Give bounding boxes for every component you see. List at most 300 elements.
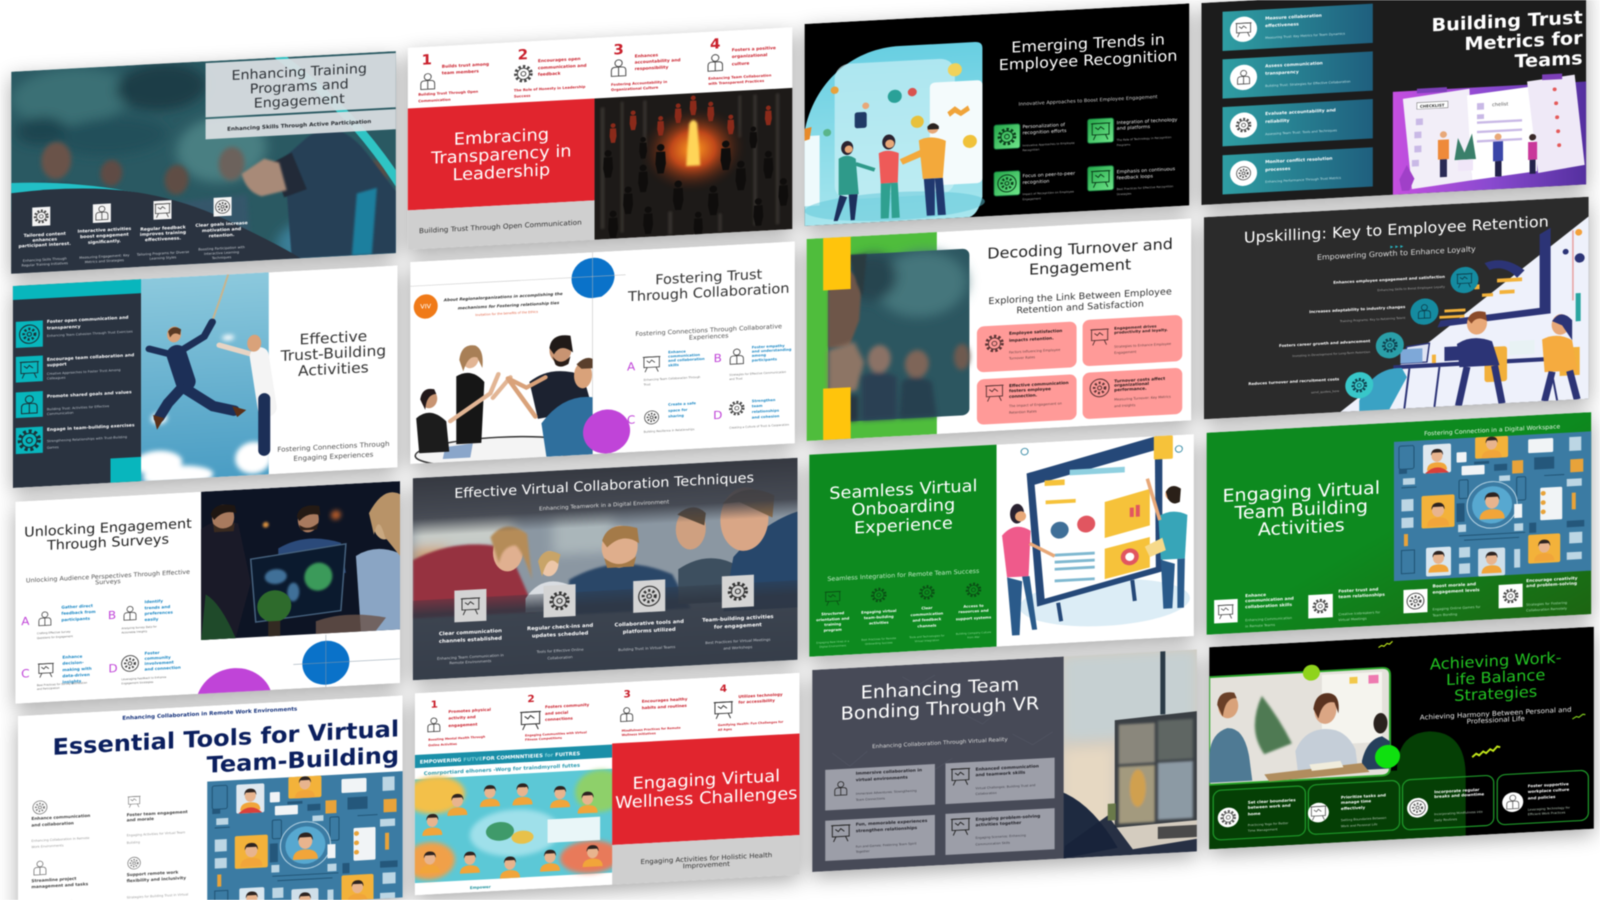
four lettered items: Crafting Effective Survey [37,630,71,635]
panel: Effective Virtual Collaboration Techniques slide [413,458,797,680]
four pink cards: Turnover Rates [1008,355,1035,361]
four teal circles [1345,266,1478,399]
four lettered items: insights [62,679,82,684]
four lettered items: decision- [62,660,84,666]
four numbered items: 2 [518,47,528,63]
subtitle: Seamless Integration for Remote Team Success [827,568,979,583]
four pink cards: Employee satisfaction [1009,328,1062,336]
four lettered items: data-driven [62,672,90,678]
four benefit rows: send_quotes_here [1311,389,1339,394]
four tool items: Foster team engagement [127,809,188,817]
purple semicircle [196,666,273,742]
four numbered items: 1 [431,700,438,711]
four numbered items: The Role of Honesty in Leadership [514,85,586,93]
panel: Engaging Virtual Wellness Challenges slide [405,673,799,896]
four benefit columns [19,196,248,271]
four cards: Engaging problem-solving [975,813,1040,823]
four lettered items: D [108,661,118,675]
four lettered items: easily [145,616,159,622]
community poster image: Comrportiard elhoners -Worg for traindmyroll futtes [424,763,580,777]
panel: Emerging Trends in Employee Recognition slide [795,3,1189,227]
illustration: checklists [1393,72,1586,195]
four cards: Communication Skills [975,841,1010,846]
four activity items: and problem-solving [1526,581,1577,589]
four activity items [1214,575,1578,630]
dark green overlay [1209,729,1466,849]
purple circle [583,408,630,455]
four activity items: Collaboration Remotely [1526,606,1567,612]
title: Upskilling: Key to Employee Retention [1244,213,1549,247]
four onboarding columns: orientation and [816,617,850,622]
four benefit rows: Fosters career growth and advancement [1279,338,1370,348]
four cards: Enhanced communication [975,763,1039,773]
four cards: Fun, memorable experiences [856,818,928,828]
four benefit rows: Reduces turnover and recruitment costs [1248,376,1340,386]
four technique columns: Regular check-ins and [527,623,593,632]
four benefit columns: Tailoring Programs for Diverse [136,250,189,257]
left list panel: Communication [47,411,74,416]
four recognition items: recognition [1022,179,1050,186]
title: Fostering Trust [655,267,763,288]
subtitle panel grey: Improvement [683,860,730,870]
four pink cards: Strategies to Enhance Employee [1114,342,1171,349]
four onboarding columns: from Afar [967,635,981,639]
left list panel: Promote shared goals and values [47,389,132,400]
four lettered items: among [752,353,766,358]
four numbered items: 3 [613,42,624,58]
panel: Building Trust Metrics for Teams slide [1202,0,1586,205]
title: Engagement [1029,256,1131,279]
four numbered items: Promotes physical [448,707,492,714]
four cards: and teamwork skills [975,770,1026,778]
four lettered items: communication [668,353,700,359]
four lettered items: involvement [145,660,174,666]
four recognition items: Best Practices for Effective Recognition [1117,184,1174,191]
four strategy cards: between work and [1248,803,1291,810]
panel: Essential Tools for Virtual Team-Building slide [18,695,405,900]
four tool items: flexibility and inclusivity [127,875,186,883]
four teal metric bars [1223,4,1373,195]
four recognition items: feedback loops [1117,174,1154,181]
photo: high five team [415,334,593,470]
panel: Upskilling slide [1204,197,1589,419]
garbled header text: About Regionalorganizations in accomplishing the [443,291,563,302]
four lettered items: skills [668,363,679,367]
subtitle: Retention and Satisfaction [1016,299,1144,316]
four recognition items: Strategies [1117,192,1132,196]
four benefit columns: Boosting Participation with [198,245,245,252]
four numbered items: Building Trust Through Open [418,90,479,97]
four lettered items: participants [61,616,91,622]
four lettered items: Best Practices for Survey Distribution [37,681,88,687]
four onboarding columns: Digital Environment [819,643,846,649]
title: Strategies [1454,682,1537,705]
four numbered items [428,681,784,747]
illustration: team handshake [795,41,985,227]
four numbered items: responsibility [635,64,669,72]
four lettered items: Enhance [62,654,83,660]
four recognition items: Innovative Approaches to Employee [1022,141,1075,148]
title: Activities [1258,516,1345,540]
four onboarding columns: Clear [921,606,933,611]
photo: pointing businessman with blurred team [11,51,397,287]
four numbered items: Utilizes technology [738,692,783,699]
green panel [809,440,997,657]
four lettered items [627,343,792,435]
title: Activities [298,359,369,380]
four lettered items: space for [668,408,688,413]
left list panel: Engage in team-building exercises [47,422,135,433]
four activity items: Virtual Meetings [1338,617,1367,622]
four lettered items: Actionable Insights [121,629,148,634]
four numbered items: for accessibility [738,698,775,705]
four numbered items: Mindfulness Practices for Remote [622,726,681,733]
title panel red: Embracing [454,125,549,150]
four numbered items: 3 [624,689,631,700]
left list panel [13,279,141,488]
four onboarding columns: Virtual Integration [915,638,940,643]
four benefit rows [1248,274,1445,398]
title panel red: Leadership [453,161,550,185]
illustration: checklists: chelist [1492,101,1508,108]
title: Effective [300,327,367,348]
four benefit rows: Increases adaptability to industry changes [1309,304,1406,314]
four recognition items: Recognition [1022,147,1040,152]
title: Experience [854,514,953,538]
title: Employee Recognition [999,47,1177,74]
four activity items: Engaging Online Games for [1433,605,1481,611]
four numbered items: Fitness Competitions [525,736,562,742]
four teal metric bars: Assessing Team Trust: Tools and Techniques [1265,128,1337,136]
four pink cards: Effective communication [1009,380,1069,388]
subtitle: Fostering Connections Through Collaborative [635,323,782,338]
four benefit rows: Training Programs: Key to Retaining Talent [1339,316,1406,323]
illustration: remote team icons [207,771,405,900]
photo: three women in a meeting [1209,668,1390,785]
four benefit columns: boost engagement [80,232,130,240]
four onboarding columns: Engaging virtual [861,609,896,615]
four numbered items: communication and [538,63,587,71]
four pink cards [977,315,1182,425]
four pink cards: Turnover costs affect [1114,376,1165,383]
title panel red [408,98,595,210]
four activity items: Enhance [1245,592,1266,599]
four technique columns: Clear communication [439,628,502,637]
garbled header text: mechanisms for Fostering relationship ties [458,300,560,310]
four recognition items: Programs [1117,143,1131,147]
four benefit columns: significantly. [88,238,121,246]
four lettered items: Create a safe [668,401,696,407]
title: Engaging Virtual [1223,478,1380,507]
four lettered items: Trust [643,382,652,387]
panel: Enhancing Training Programs and Engagement slide [11,49,397,287]
four technique columns: platforms utilized [623,627,676,635]
title: Achieving Work- [1430,648,1562,673]
four benefit columns: Interactive Learning [204,250,239,256]
four onboarding columns: Structured [821,611,845,616]
panel: Decoding Turnover and Engagement slide [807,218,1191,441]
four activity items: Boost morale and [1433,581,1476,589]
four teal metric bars: effectiveness [1265,22,1299,29]
four strategy cards: Setting Boundaries Between [1341,816,1386,822]
four numbered items: team members [442,69,479,76]
four technique columns: Enhancing Team Communication in [437,653,505,661]
left list panel: support [47,362,67,368]
title panel red [612,734,799,845]
four numbered items: Enhancing Team Collaboration [708,73,772,81]
four technique columns: Team-building activities [702,614,774,624]
subtitle: Enhancing Collaboration in Remote Work Environments [122,707,297,722]
four numbered items: Fostering Accountability in [611,80,668,87]
logo circle: VIV [420,303,432,311]
four pink cards: fosters employee [1009,386,1051,393]
subtitle: Exploring the Link Between Employee [988,287,1172,307]
title: Team-Building [207,742,399,779]
title: Metrics for [1464,28,1584,55]
four numbered items: Communication [418,98,451,103]
panel: Seamless Virtual Onboarding Experience slide [809,429,1194,657]
four benefit columns: Tailored content [24,231,67,239]
four tool items: Enhancing Collaboration in Remote [31,836,90,843]
illustration: team at laptops [1340,216,1589,412]
panel: Enhancing Team Bonding Through VR slide [812,649,1197,872]
four lettered items: Enhance [668,350,686,354]
four cards: Team Connections [855,796,885,802]
four recognition items: and platforms [1117,124,1151,132]
four strategy cards: Daily Routines [1434,817,1457,822]
four lettered items: C [21,667,30,681]
four lettered items: Analyzing Survey Data for [121,624,158,630]
four cards: Engaging Scenarios: Enhancing [975,833,1026,840]
four lettered items: and cohesion [752,414,780,420]
four lettered items: A [21,614,29,628]
four pink cards: The Impact of Engagement on [1008,402,1062,408]
four pink cards: Factors Influencing Employee [1009,348,1060,354]
four cards: Immersive Adventures: Strengthening [856,789,917,796]
four benefit columns: Measuring Engagement: Key [79,253,129,260]
four benefit columns: Regular feedback [140,224,187,233]
title: Through Surveys [46,532,169,554]
four activity items: Encourage creativity [1526,575,1578,584]
four activity items: collaboration skills [1245,602,1292,610]
four strategy cards: home [1248,811,1261,816]
four benefit columns: Metrics and Strategies [85,258,124,264]
four numbered items: engagement [448,722,478,728]
four numbered items: 4 [720,684,727,695]
bottom dark panel [10,188,300,274]
four teal metric bars: Monitor conflict resolution [1265,156,1333,165]
four onboarding columns [816,583,992,649]
four activity items: team relationships [1338,592,1385,600]
four lettered items: participants [752,357,777,363]
four activity items: Enhancing Communication [1245,616,1292,622]
four numbered items: connections [545,716,574,722]
four cards: virtual environments [856,775,908,783]
four teal metric bars: Measure collaboration [1265,13,1322,22]
garbled header text [443,291,563,319]
title panel red: Engaging Virtual [633,767,780,794]
four pink cards: connection. [1009,393,1038,399]
four benefit columns: Enhancing Skills Through [23,257,67,263]
four technique columns: Building Trust in Virtual Teams [618,645,675,652]
four lettered items: and collaboration [668,357,705,363]
four strategy cards [1213,770,1588,840]
four pink cards: and Insights [1114,403,1136,408]
four recognition items: Engagement [1022,196,1042,201]
four pink cards: productivity and loyalty. [1114,327,1168,335]
four onboarding columns: training [824,622,842,627]
four strategy cards: Efficient Work Practices [1528,811,1566,816]
four tool items: Streamline project [31,876,77,883]
four strategy cards: effectively [1341,805,1366,811]
four tool items: management and tasks [31,881,89,889]
four benefit columns: Regular Training Initiatives [22,261,68,268]
four benefit columns: enhances [32,237,57,244]
four technique columns: Remote Environments [449,659,492,665]
teal band [10,182,126,194]
four strategy cards: Practicing Yoga for Better [1248,821,1289,827]
four lettered items: Strengthen [752,398,776,403]
four recognition items: recognition efforts [1022,128,1067,136]
four technique columns: Tools for Effective Online [536,648,584,654]
title: Essential Tools for Virtual [52,716,399,761]
panel: Achieving Work-Life Balance Strategies slide [1209,627,1594,849]
title: Effective Virtual Collaboration Techniques [454,470,754,502]
left list panel: Enhancing Team Cohesion Through Trust Exercises [47,330,133,338]
four lettered items: B [108,608,116,622]
four lettered items: Leveraging Feedback to Enhance [121,675,167,681]
subtitle panel grey: Building Trust Through Open Communication [419,218,582,235]
four benefit rows: Investing in Development for Long-Term Retention [1292,350,1370,358]
four strategy cards: Prioritize tasks and [1341,792,1386,800]
four pink cards: Engagement drives [1114,323,1157,331]
title: Decoding Turnover and [987,235,1173,263]
panel: Unlocking Engagement Through Surveys slide [15,481,400,752]
four numbered items: Success [514,94,530,99]
four lettered items: trends and [145,604,170,610]
blue circle [571,257,615,299]
four benefit columns: effectiveness. [145,235,181,243]
four lettered items: Building Resilience in Relationships [644,427,695,434]
subtitle: Enhancing Collaboration Through Virtual Reality [872,737,1009,750]
logo circle [414,294,438,319]
subtitle panel grey [612,835,799,885]
subtitle panel grey: Engaging Activities for Holistic Health [640,851,772,866]
photo: team leaning over a laptop [413,458,797,680]
four tool items: and morale [127,816,154,822]
title: Teams [1514,49,1583,72]
four lettered items: A [627,360,635,373]
four technique columns: updates scheduled [532,631,589,639]
four tool items: Support remote work [127,870,179,877]
dark top band [413,458,797,537]
four teal metric bars: Building Trust: Strategies for Effective Collaboration [1265,80,1350,88]
four lettered items: C [627,413,635,427]
panel: Embracing Transparency in Leadership slide [408,27,792,253]
panel: Fostering Trust Through Collaboration slide [410,241,795,470]
four numbered items: Builds trust among [442,61,489,70]
subtitle: Achieving Harmony Between Personal and [1420,706,1572,722]
four numbered items: 1 [422,53,432,69]
four recognition items: Personalization of [1022,122,1065,130]
subtitle: Surveys [95,578,121,586]
four tool items: and collaboration [31,820,74,828]
four technique columns [437,574,774,666]
four strategy cards: Time Management [1247,827,1278,833]
four activity items: Team Bonding [1431,612,1457,618]
subtitle: Innovative Approaches to Boost Employee Engagement [1019,94,1158,108]
accent swoosh [274,49,396,193]
four activity items: Strategies for Fostering [1526,601,1567,607]
title: Building Trust [1431,8,1583,36]
four activity items: Creative Icebreakers for [1338,610,1381,616]
community poster image: Empower [470,884,491,890]
four recognition items: Focus on peer-to-peer [1022,171,1075,179]
four lettered items: B [714,351,722,365]
left list panel: Building Trust: Activities for Effective [47,404,109,411]
title: Onboarding [851,496,955,520]
four teal metric bars: Evaluate accountability and [1265,107,1336,117]
four teal metric bars: transparency [1265,69,1299,77]
four onboarding columns: program [824,628,842,633]
title panel red: Transparency in [430,142,572,169]
subtitle: Unlocking Audience Perspectives Through Effective [26,569,190,584]
four activity items: Foster trust and [1338,587,1378,595]
left list panel: Creative Approaches to Foster Trust Among [47,368,120,376]
subtitle: Experiences [689,333,729,342]
community poster image: EMPOWERING FUTVEFOR COMMNNTIEIES for FUITRES [420,751,580,766]
four lettered items: D [713,408,722,422]
four benefit columns: improves training [140,230,186,238]
four teal metric bars: Enhancing Performance Through Trust Metrics [1265,176,1341,184]
four recognition items: Impact of Recognition on Employee [1022,190,1074,196]
four recognition items: Emphasis on continuous [1117,166,1176,175]
four numbered items: feedback [538,71,561,78]
illustration: remote team icons [1394,431,1591,581]
four numbered items: Online Activities [428,742,457,747]
title: Unlocking Engagement [24,516,192,541]
left slate panel [812,657,1064,872]
blue cross circle [293,631,400,690]
four lettered items: Gather direct [61,603,93,610]
four onboarding columns: channels [917,624,937,628]
title panel red: Wellness Challenges [615,784,797,813]
four benefit columns: participant interest. [19,241,71,250]
four lettered items: Engagement Strategies [121,680,154,685]
title: Enhancing Team [861,675,1019,704]
subtitle panel grey [408,200,595,250]
four teal metric bars: reliability [1265,118,1290,125]
four lettered items: Strategies for Effective Communication [729,370,786,377]
panel: Engaging Virtual Team Building Activities slide [1207,412,1591,635]
four pink cards: impacts retention. [1009,336,1054,343]
title: Trust-Building [280,342,386,365]
four cards: Fun and Games: Fostering Team Spirit [856,842,917,849]
four cards: Immersive collaboration in [856,767,922,777]
four numbered items: Encourages open [538,56,580,64]
four numbered items: activity and [448,714,476,721]
photo: glowing leader in a crowd [595,88,792,243]
four lettered items: Enhancing Team Collaboration Through [644,375,701,382]
four onboarding columns: Best Practices for Remote [861,636,897,642]
four lettered items: preferences [145,610,173,616]
subtitle panel [206,109,396,139]
four numbered items: Organizational Culture [611,86,659,92]
subtitle: Enhancing Teamwork in a Digital Environment [539,499,670,512]
four lettered items: Identify [145,598,163,604]
subtitle: Fostering Connection in a Digital Workspace [1424,423,1560,437]
four recognition items [994,114,1178,203]
